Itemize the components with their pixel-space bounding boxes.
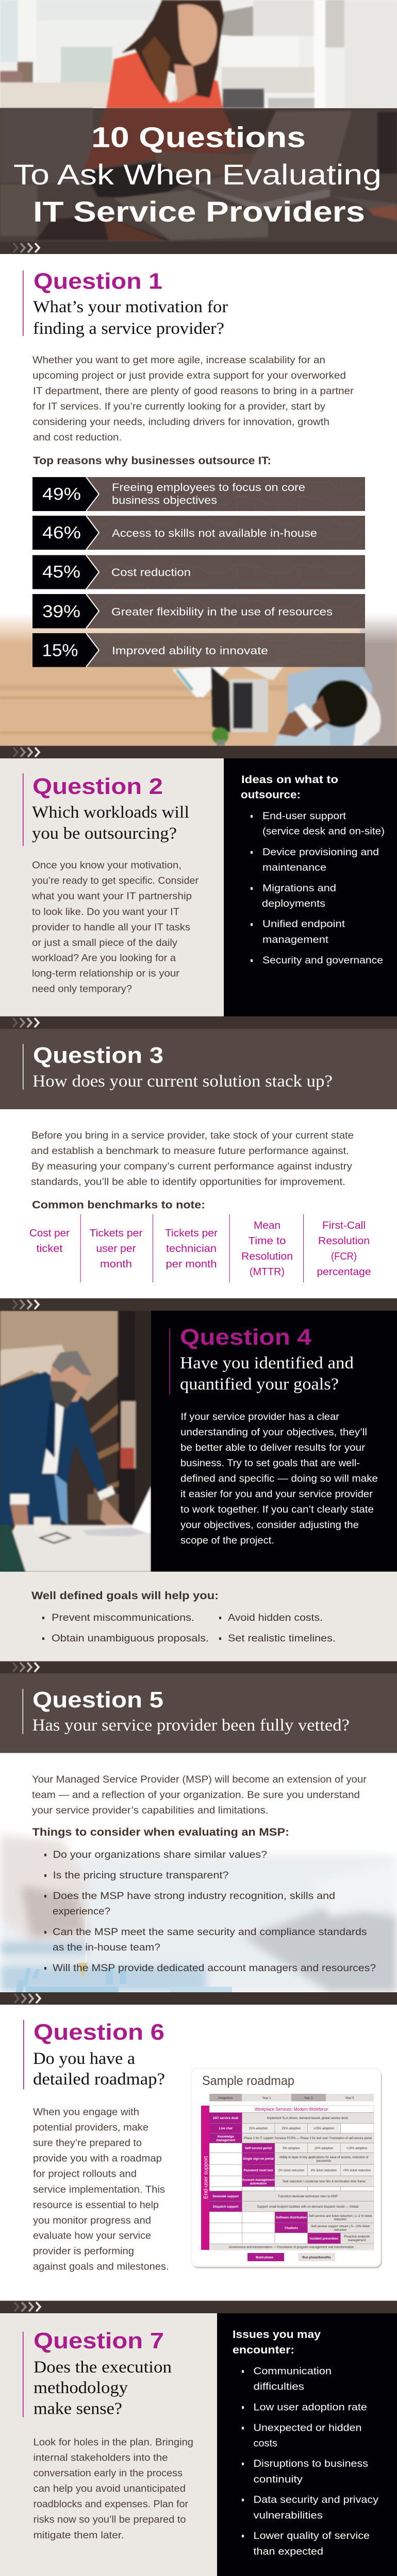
- body text: question 2: what you want your IT partnership: [31, 891, 192, 902]
- heading: question 2: you be outsourcing?: [32, 824, 177, 843]
- subheading: ideas: Ideas on what to: [241, 774, 338, 786]
- heading: question 2: Question 2: [32, 774, 163, 799]
- table cell labels: Task reduction / condense new hire & termination time frame: [282, 2180, 366, 2183]
- heading: question 4: quantified your goals?: [180, 1375, 339, 1394]
- body text: question 6: potential providers, make: [33, 2122, 148, 2133]
- stat row 39%: [32, 594, 365, 629]
- table grid lines: [209, 2112, 374, 2244]
- bullet list: goals: Set realistic timelines.: [228, 1633, 336, 1644]
- title: 10 Questions: [91, 121, 306, 154]
- section bar with chevrons: [0, 1016, 397, 1029]
- section bar with chevrons: [0, 2301, 397, 2314]
- heading: question 6: Question 6: [34, 2020, 164, 2045]
- stat row 49%: [32, 477, 365, 511]
- subheading: ideas: [241, 774, 338, 801]
- hero photo: [0, 0, 397, 242]
- left strip: end-user support: End-user support: [203, 2156, 209, 2199]
- body text: question 7: conversation early in the process: [33, 2468, 183, 2479]
- title: IT Service Providers: [33, 195, 365, 228]
- benchmark: first-call resolution: First-Call: [322, 1219, 366, 1231]
- table cell labels: Password reset tool: [243, 2169, 273, 2172]
- table cell labels: Dispatch support: [213, 2206, 238, 2209]
- panel: issues you may encounter: [217, 2313, 397, 2576]
- heading: question 1: Question 1: [34, 269, 162, 294]
- question 6 section: [0, 2020, 397, 2313]
- panel: question 4 text: [151, 1311, 397, 1572]
- section bar with chevrons: [0, 746, 397, 758]
- roadmap timeline header: Year 1: [262, 2097, 271, 2100]
- table cell labels: Incident prevention: [310, 2238, 339, 2241]
- bullet list: evaluating an MSP: Can the MSP meet the same security and compliance standards: [53, 1926, 367, 1938]
- table cell labels: Single sign-on portal: [243, 2158, 274, 2161]
- question 5 section: [0, 1673, 397, 2005]
- table cell labels: management: [348, 2239, 366, 2242]
- panel: ideas on what to outsource: [224, 758, 397, 1016]
- left strip: end-user support: [201, 2106, 209, 2250]
- body text: question 4: it easier for you and your service provider: [180, 1488, 373, 1500]
- body text: question 4: to work together. If you can’t clearly state: [180, 1504, 374, 1515]
- bullet list: issues: continuity: [254, 2473, 303, 2485]
- bullet list: ideas: End-user support: [262, 810, 346, 822]
- heading: question 6: Do you have a: [33, 2049, 135, 2068]
- body text: question 6: service implementation. This: [33, 2184, 165, 2195]
- benchmark: tickets per user per month: [90, 1227, 143, 1270]
- body text: question 2: you’re ready to get specific. Consider: [32, 875, 199, 887]
- stat row 49%: Freeing employees to focus on core: [112, 481, 305, 494]
- heading: question 7: methodology: [34, 2379, 128, 2397]
- panel: question 5 heading: [0, 1673, 397, 1753]
- bullet list: goals: [42, 1612, 336, 1644]
- stat row 46%: [32, 516, 365, 550]
- stat row 39%: 39%: [42, 602, 80, 621]
- body text: question 2: Once you know your motivation,: [32, 860, 181, 871]
- table cell labels: Ability to layer in key applications for ease of access, reduction of: [279, 2156, 369, 2159]
- table cell labels: reduction: [334, 2218, 346, 2222]
- body text: question 5: team — and a reflection of your organization. Be sure you understand: [32, 1789, 360, 1801]
- hero section: [0, 0, 397, 254]
- stat row 15%: Improved ability to innovate: [112, 645, 268, 657]
- bullet list: evaluating an MSP: [44, 1849, 376, 1974]
- table cell labels: Phase 1 for IT support: Increase FCR% — Phase 2 for end user: Foundation of self-service portal: [244, 2137, 372, 2140]
- panel: question 5 heading: Has your service provider been fully vetted?: [32, 1716, 350, 1735]
- body text: question 6: evaluate how your service: [33, 2230, 151, 2241]
- photo: businessman at laptop: [0, 1311, 151, 1572]
- benchmark: cost per ticket: Cost per: [29, 1227, 70, 1239]
- question 4 section: [0, 1311, 397, 1673]
- bullet list: issues: difficulties: [254, 2381, 304, 2393]
- heading: question 7: [23, 2328, 172, 2418]
- table cell labels: Transition deskside technician roles to MSP: [278, 2195, 338, 2198]
- subheading: things to consider: Things to consider when evaluating an MSP:: [32, 1826, 289, 1838]
- bullet list: issues: Lower quality of service: [254, 2530, 370, 2541]
- table cell labels: Self-service portal: [245, 2147, 272, 2150]
- table cell labels: Deskside support: [213, 2195, 239, 2198]
- table cell labels: 15% adoption: [249, 2127, 268, 2130]
- benchmark: tickets per technician per month: Tickets per: [165, 1227, 218, 1239]
- body text: question 4: business. Try to set goals that are well-: [180, 1458, 360, 1469]
- body text: question 2: long-term relationship or is your: [32, 968, 180, 979]
- stat row 15%: 15%: [42, 641, 78, 660]
- bullet list: ideas: maintenance: [262, 862, 326, 873]
- heading: question 7: Does the execution: [34, 2358, 172, 2377]
- section bar with chevrons: [0, 1661, 397, 1673]
- panel: well defined goals: [0, 1572, 397, 1662]
- body text: question 6: [33, 2106, 169, 2272]
- table cell labels: Knowledge: [218, 2136, 234, 2139]
- body text: question 1: and cost reduction.: [33, 432, 122, 443]
- table cell labels: Implement SLA-driven, demand-based, global service desk.: [267, 2117, 349, 2120]
- heading: question 1: What’s your motivation for: [33, 298, 228, 316]
- body text: question 1: for IT services. If you’re currently looking for a provider, start by: [33, 401, 325, 412]
- benchmark: tickets per user per month: month: [100, 1258, 132, 1270]
- heading: question 7: make sense?: [34, 2400, 122, 2418]
- table cell labels: Proactive endpoint: [344, 2235, 370, 2239]
- body text: question 3: Before you bring in a service provider, take stock of your current state: [31, 1130, 354, 1141]
- table cell labels: [213, 2117, 372, 2249]
- question 7 section: [0, 2313, 397, 2576]
- body text: question 4: understanding of your objectives, they’ll: [180, 1427, 367, 1438]
- subheading: top reasons: Top reasons why businesses outsource IT:: [33, 455, 271, 467]
- body text: question 3: standards, you’ll be able to identify opportunities for improvement.: [31, 1176, 345, 1188]
- bullet list: issues: [242, 2366, 378, 2557]
- body text: question 1: Whether you want to get more agile, increase scalability for an: [32, 354, 325, 366]
- title: To Ask When Evaluating: [13, 158, 382, 191]
- bullet list: ideas: Security and governance: [262, 955, 383, 966]
- table cell labels: Account management: [242, 2179, 274, 2182]
- title: [13, 121, 382, 228]
- section bar with chevrons: [0, 242, 397, 254]
- stat row 39%: Greater flexibility in the use of resources: [111, 606, 333, 618]
- body text: question 1: IT department, there are plenty of good reasons to bring in a partner: [33, 385, 354, 397]
- roadmap timeline header: [209, 2094, 374, 2102]
- bullet list: ideas: Device provisioning and: [262, 846, 379, 858]
- table cell labels: 2% ticket reduction: [278, 2169, 304, 2172]
- bullet list: issues: Communication: [254, 2366, 332, 2377]
- body text: question 7: roadblocks and expenses. Plan for: [33, 2499, 189, 2510]
- bullet list: issues: Low user adoption rate: [254, 2402, 367, 2413]
- table cell labels: 24/7 service desk: [213, 2117, 239, 2120]
- benchmark: first-call resolution: Resolution: [318, 1235, 370, 1247]
- benchmark: first-call resolution: percentage: [317, 1266, 371, 1278]
- body text: question 1: [32, 354, 354, 443]
- bullet list: ideas: [251, 810, 385, 966]
- bullet list: evaluating an MSP: Will the MSP provide dedicated account managers and resources?: [53, 1962, 376, 1974]
- heading: question 6: [23, 2020, 165, 2090]
- benchmark: tickets per user per month: Tickets per: [90, 1227, 143, 1239]
- benchmark: mean time to resolution: [241, 1219, 293, 1278]
- roadmap legend: [247, 2253, 335, 2261]
- panel: question 3 heading: How does your current solution stack up?: [32, 1072, 333, 1091]
- subheading: issues: Issues you may: [233, 2329, 321, 2341]
- photo: person at desk from above: [0, 613, 397, 746]
- benchmark: mean time to resolution: Time to: [249, 1235, 286, 1247]
- section bar with chevrons: [0, 1992, 397, 2005]
- table cell labels: Self-service and ticket reduction | 1–2 % ticket: [309, 2215, 372, 2218]
- question 2 section: [0, 758, 397, 1029]
- body text: question 7: mitigate them later.: [33, 2530, 124, 2541]
- table cell labels: Software distribution: [276, 2216, 307, 2219]
- table title: Workplace Services: Modern Workforce: [255, 2107, 328, 2112]
- subheading: well defined goals: Well defined goals will help you:: [31, 1590, 219, 1602]
- body text: question 7: risks now so you’ll be prepared to: [33, 2514, 186, 2526]
- bullet list: issues: Disruptions to business: [254, 2458, 368, 2469]
- panel: question 5 heading: Question 5: [32, 1687, 163, 1713]
- body text: question 6: provider is performing: [33, 2246, 134, 2257]
- body text: question 5: [32, 1774, 367, 1816]
- table cell labels: Support small-footprint facilities with on-demand dispatch model — Global: [257, 2206, 358, 2209]
- body text: question 2: [31, 860, 199, 994]
- body text: question 2: need only temporary?: [32, 983, 132, 994]
- panel: question 3 heading: Question 3: [33, 1043, 163, 1068]
- table cell labels: management: [216, 2139, 235, 2142]
- table cell labels: 10% adoption: [315, 2147, 333, 2150]
- bullet list: goals: Avoid hidden costs.: [228, 1612, 323, 1623]
- table cell labels: automation: [250, 2182, 267, 2185]
- body text: question 4: [180, 1411, 378, 1546]
- bullet list: issues: costs: [254, 2438, 277, 2449]
- body text: question 4: If your service provider has a clear: [180, 1411, 340, 1422]
- body text: question 7: can help you avoid unanticipated: [33, 2483, 186, 2495]
- body text: question 2: or just a small piece of the daily: [32, 937, 177, 948]
- body text: question 7: [33, 2437, 193, 2541]
- benchmark: tickets per technician per month: [165, 1227, 218, 1270]
- stat row 46%: 46%: [42, 523, 81, 542]
- body text: question 6: for project rollouts and: [33, 2168, 137, 2180]
- bullet list: ideas: (service desk and on-site): [262, 826, 385, 837]
- heading: question 1: finding a service provider?: [33, 319, 224, 338]
- table cell labels: 4% ticket reduction: [311, 2169, 337, 2172]
- body text: question 2: to look like. Do you want your IT: [32, 906, 179, 918]
- body text: question 6: resource is essential to help: [33, 2199, 159, 2211]
- bullet list: issues: vulnerabilities: [254, 2510, 323, 2521]
- stat rows: top reasons: [32, 477, 365, 667]
- body text: question 4: defined and specific — doing so will make: [180, 1473, 378, 1484]
- heading: question 4: Have you identified and: [180, 1354, 354, 1372]
- bullet list: ideas: deployments: [262, 898, 325, 909]
- table cell labels: >25% adoption: [313, 2127, 334, 2130]
- bullet list: issues: Unexpected or hidden: [254, 2422, 362, 2433]
- bullet list: evaluating an MSP: Is the pricing structure transparent?: [53, 1870, 229, 1881]
- benchmark: tickets per user per month: user per: [96, 1243, 136, 1255]
- body text: question 7: Look for holes in the plan. Bringing: [33, 2437, 193, 2448]
- bullet list: ideas: Unified endpoint: [262, 918, 345, 929]
- benchmark: mean time to resolution: Mean: [254, 1219, 280, 1231]
- body text: question 6: you monitor progress and: [33, 2215, 151, 2226]
- question 1 section: [0, 269, 397, 758]
- benchmark: mean time to resolution: Resolution: [241, 1250, 293, 1262]
- bullet list: goals: Obtain unambiguous proposals.: [52, 1633, 209, 1644]
- benchmark: tickets per technician per month: per month: [166, 1258, 217, 1270]
- table cell labels: Chatbots: [285, 2227, 299, 2230]
- grey and magenta table cells: [209, 2112, 374, 2250]
- body text: question 4: be better able to deliver results for your: [180, 1442, 366, 1453]
- body text: question 3: [31, 1130, 354, 1188]
- heading: question 2: [23, 773, 189, 846]
- bullet list: evaluating an MSP: Do your organizations share similar values?: [53, 1849, 267, 1860]
- stat row 45%: 45%: [42, 562, 80, 581]
- roadmap timeline header: Year 5: [345, 2097, 354, 2100]
- table cell labels: 5% adoption: [283, 2147, 300, 2150]
- body text: question 4: your objectives, consider adjusting the: [180, 1519, 359, 1531]
- bullet list: issues: than expected: [254, 2546, 323, 2557]
- stat row 45%: [32, 555, 365, 589]
- table cell labels: 25% adoption: [282, 2127, 301, 2130]
- body text: question 3: and establish a benchmark to measure future performance against.: [31, 1145, 349, 1157]
- subheading: issues: [233, 2329, 321, 2356]
- subheading: common benchmarks: Common benchmarks to note:: [32, 1199, 205, 1211]
- table cell labels: Self-service support stream | 5– 10% ticket: [311, 2225, 370, 2228]
- benchmark: first-call resolution: [317, 1219, 371, 1278]
- body text: question 5: Your Managed Service Provider (MSP) will become an extension of your: [32, 1774, 367, 1785]
- body text: question 2: provider to handle all your IT tasks: [32, 922, 190, 933]
- heading: question 7: Question 7: [34, 2328, 164, 2353]
- benchmark: mean time to resolution: (MTTR): [250, 1266, 285, 1278]
- bullet list: evaluating an MSP: experience?: [53, 1906, 110, 1917]
- benchmark: first-call resolution: (FCR): [331, 1250, 357, 1262]
- roadmap table: [201, 2106, 374, 2250]
- bullet list: goals: Prevent miscommunications.: [52, 1612, 194, 1623]
- stat row 46%: Access to skills not available in-house: [112, 527, 317, 539]
- body text: question 6: provide you with a roadmap: [33, 2153, 162, 2164]
- panel: question 7 text: [0, 2313, 217, 2576]
- heading: question 6: detailed roadmap?: [33, 2070, 165, 2089]
- table cell labels: passwords: [317, 2160, 331, 2163]
- benchmark: tickets per technician per month: technician: [166, 1243, 217, 1255]
- subheading: issues: encounter:: [233, 2344, 294, 2356]
- bullet list: issues: Data security and privacy: [254, 2494, 378, 2505]
- faded photo: hand with pen over charts: [0, 1833, 397, 1992]
- bullet list: evaluating an MSP: Does the MSP have strong industry recognition, skills and: [53, 1890, 335, 1902]
- roadmap timeline header: Integration: [218, 2097, 233, 2100]
- stat row 15%: [32, 633, 365, 667]
- card heading: Sample roadmap: [202, 2074, 294, 2088]
- body text: question 5: your service provider’s capabilities and limitations.: [32, 1805, 268, 1816]
- body text: question 6: sure they’re prepared to: [33, 2138, 142, 2149]
- body text: question 6: When you engage with: [33, 2106, 139, 2117]
- benchmark: cost per ticket: ticket: [36, 1243, 63, 1255]
- body text: question 4: scope of the project.: [180, 1535, 274, 1546]
- stat row 49%: business objectives: [112, 494, 217, 506]
- table cell labels: reduction: [334, 2229, 346, 2232]
- heading: question 1: [23, 269, 228, 338]
- body text: question 1: upcoming project or just provide extra support for your overworked: [32, 370, 346, 381]
- panel: sample roadmap card: [191, 2069, 382, 2268]
- dark title band: [0, 108, 397, 242]
- bullet list: ideas: Migrations and: [262, 883, 336, 894]
- heading: question 4: [169, 1325, 354, 1395]
- stat row 45%: Cost reduction: [111, 566, 191, 579]
- heading: question 2: Which workloads will: [32, 803, 189, 822]
- benchmark: cost per ticket: [29, 1227, 70, 1255]
- panel: question 3 heading: [0, 1028, 397, 1109]
- body text: question 1: considering your needs, including drivers for innovation, growth: [32, 416, 329, 428]
- roadmap legend: Build phase: [256, 2257, 274, 2260]
- heading: question 4: Question 4: [180, 1325, 312, 1350]
- bullet list: evaluating an MSP: as the in-house team?: [53, 1942, 160, 1953]
- roadmap legend: Run phase/benefits: [302, 2257, 331, 2260]
- question 3 section: [0, 1029, 397, 1311]
- subheading: ideas: outsource:: [241, 789, 301, 801]
- body text: question 7: internal stakeholders into the: [33, 2452, 168, 2464]
- bullet list: ideas: management: [262, 934, 329, 945]
- stat row 49%: 49%: [42, 484, 81, 503]
- benchmark columns: [29, 1214, 371, 1282]
- table cell labels: Live chat: [219, 2127, 233, 2130]
- panel: question 2 text: [0, 758, 224, 1016]
- body text: question 3: By measuring your company’s current performance against industry: [31, 1161, 352, 1172]
- roadmap timeline header: Year 2: [304, 2097, 313, 2100]
- body text: question 2: workload? Are you looking for a: [31, 952, 176, 963]
- body text: question 6: against goals and milestones.: [33, 2261, 169, 2272]
- table cell labels: >5% ticket reduction: [343, 2169, 371, 2172]
- table cell labels: >15% adoption: [346, 2147, 367, 2150]
- section bar with chevrons: [0, 1298, 397, 1311]
- table cell labels: Governance and transformation — Foundation of program management and transformation: [229, 2246, 354, 2249]
